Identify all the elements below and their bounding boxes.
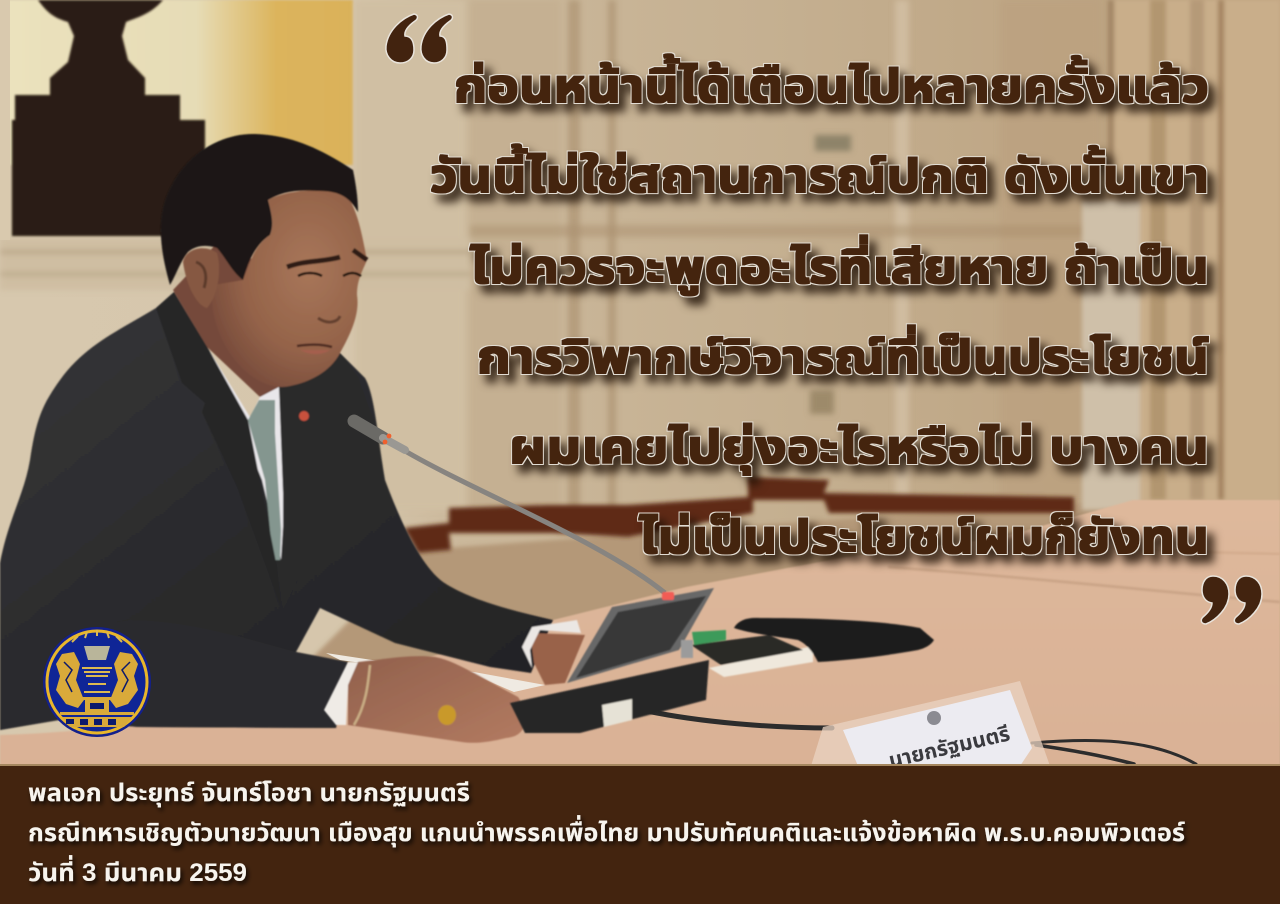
left lapel bbox=[156, 292, 281, 607]
quote text: ไม่เป็นประโยชน์ผมก็ยังทน bbox=[639, 511, 1209, 563]
neck bbox=[173, 240, 320, 397]
gold ring bbox=[438, 705, 456, 725]
quote text: ไม่ควรจะพูดอะไรที่เสียหาย ถ้าเป็น bbox=[470, 235, 1209, 295]
man in suit bbox=[0, 134, 585, 730]
name plate bbox=[811, 681, 1050, 773]
microphone bbox=[354, 421, 665, 593]
face bbox=[212, 190, 367, 387]
far arm and body bbox=[0, 292, 553, 730]
quote text bbox=[430, 54, 1209, 563]
quote text: ผมเคยไปยุ่งอะไรหรือไม่ บางคน bbox=[509, 421, 1209, 475]
emblem bbox=[43, 627, 151, 737]
caption text: วันที่ 3 มีนาคม 2559 bbox=[28, 855, 247, 887]
window glow bbox=[5, 0, 353, 165]
emblem bowl stack bbox=[64, 662, 130, 725]
name plate: นายกรัฐมนตรี bbox=[887, 722, 1012, 773]
vase on pedestal bbox=[12, 0, 205, 236]
caption text: พลเอก ประยุทธ์ จันทร์โอชา นายกรัฐมนตรี bbox=[28, 779, 470, 808]
wall panels bbox=[0, 0, 1100, 510]
table bbox=[0, 500, 1280, 770]
quote text: การวิพากษ์วิจารณ์ที่เป็นประโยชน์ bbox=[477, 325, 1209, 383]
quote text: ก่อนหน้านี้ได้เตือนไปหลายครั้งแล้ว bbox=[454, 54, 1209, 112]
caption text: กรณีทหารเชิญตัวนายวัฒนา เมืองสุข แกนนำพรรคเพื่อไทย มาปรับทัศนคติและแจ้งข้อหาผิด พ.ร.บ.คอมพิวเตอร์ bbox=[28, 815, 1185, 848]
hair bbox=[161, 134, 358, 285]
closing quotation mark bbox=[1201, 576, 1262, 624]
eyebrows and eyes bbox=[287, 257, 340, 267]
conference unit bbox=[510, 588, 714, 733]
tie bbox=[248, 400, 281, 560]
ear bbox=[183, 248, 219, 308]
caption text bbox=[28, 779, 1185, 887]
cables bbox=[647, 711, 1196, 764]
bracelet bbox=[354, 665, 370, 725]
far hand bbox=[530, 633, 585, 685]
near hand bbox=[324, 656, 524, 743]
right lapel bbox=[279, 353, 373, 610]
quote text: วันนี้ไม่ใช่สถานการณ์ปกติ ดังนั้นเขา bbox=[430, 144, 1209, 202]
lapel pin bbox=[299, 411, 309, 421]
nose and mouth bbox=[318, 316, 340, 322]
opening quotation mark bbox=[386, 14, 452, 63]
document under hand bbox=[326, 653, 545, 692]
curtain bbox=[1082, 0, 1280, 510]
floor bbox=[290, 500, 1133, 680]
shirt cuff bbox=[324, 662, 358, 725]
shirt bbox=[209, 350, 285, 560]
caption band bbox=[0, 764, 1280, 904]
skirting bbox=[404, 477, 1074, 553]
emblem lions bbox=[56, 652, 138, 727]
notebook and black pouch bbox=[691, 618, 934, 677]
forearm sleeve bbox=[0, 620, 348, 730]
